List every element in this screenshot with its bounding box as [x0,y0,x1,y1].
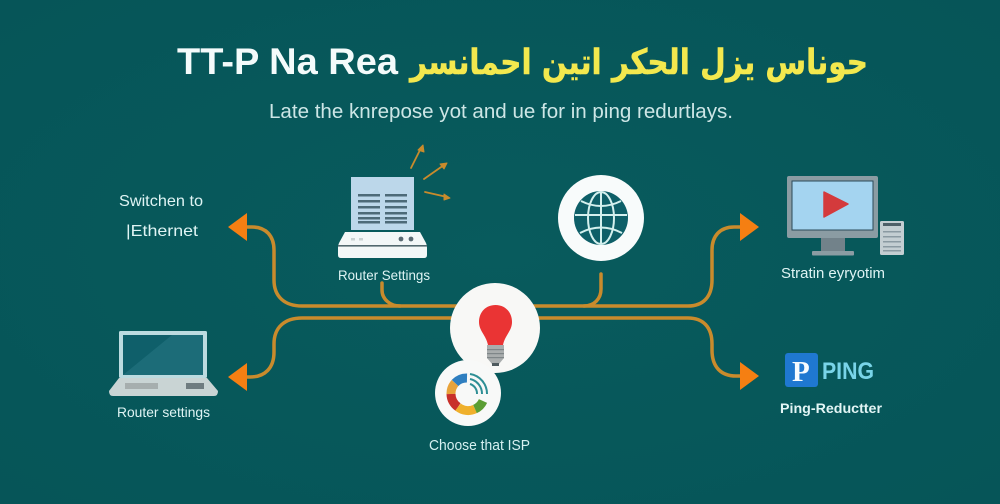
connector network [245,227,742,377]
subtitle: Late the knrepose yot and ue for in ping redurtlays. [269,101,733,123]
icon: ISP colour ring [435,360,501,426]
label: Switchen to Ethernet: |Ethernet [126,223,199,240]
arrow: to monitor [740,213,759,241]
label: Ping-Reductter: Ping-Reductter [780,400,883,416]
icon: globe [558,175,644,261]
arrow: to laptop [228,363,247,391]
label: Router settings: Router settings [117,404,210,420]
arrow: to Ethernet [228,213,247,241]
title [177,41,868,83]
label: Switchen to Ethernet [119,193,203,240]
arrow: to ping [740,362,759,390]
label: Switchen to Ethernet: Switchen to [119,193,203,210]
icon: router [338,177,427,258]
icon: PING logo: P [792,356,810,388]
label: Choose that ISP: Choose that ISP [429,437,530,454]
icon: monitor with play button [787,176,904,256]
icon: signal arrows [411,145,450,200]
title: TT-P Na Rea [177,41,398,82]
icon: laptop [109,331,218,396]
icon: red light bulb [450,283,540,373]
icon: PING logo: PING [822,358,874,385]
label: Stratin eyryotim: Stratin eyryotim [781,265,885,282]
icon: PING logo [785,353,874,388]
title: حوناس يزل الحكر اتين احمانسر [408,43,868,83]
label: Router Settings: Router Settings [338,267,430,283]
